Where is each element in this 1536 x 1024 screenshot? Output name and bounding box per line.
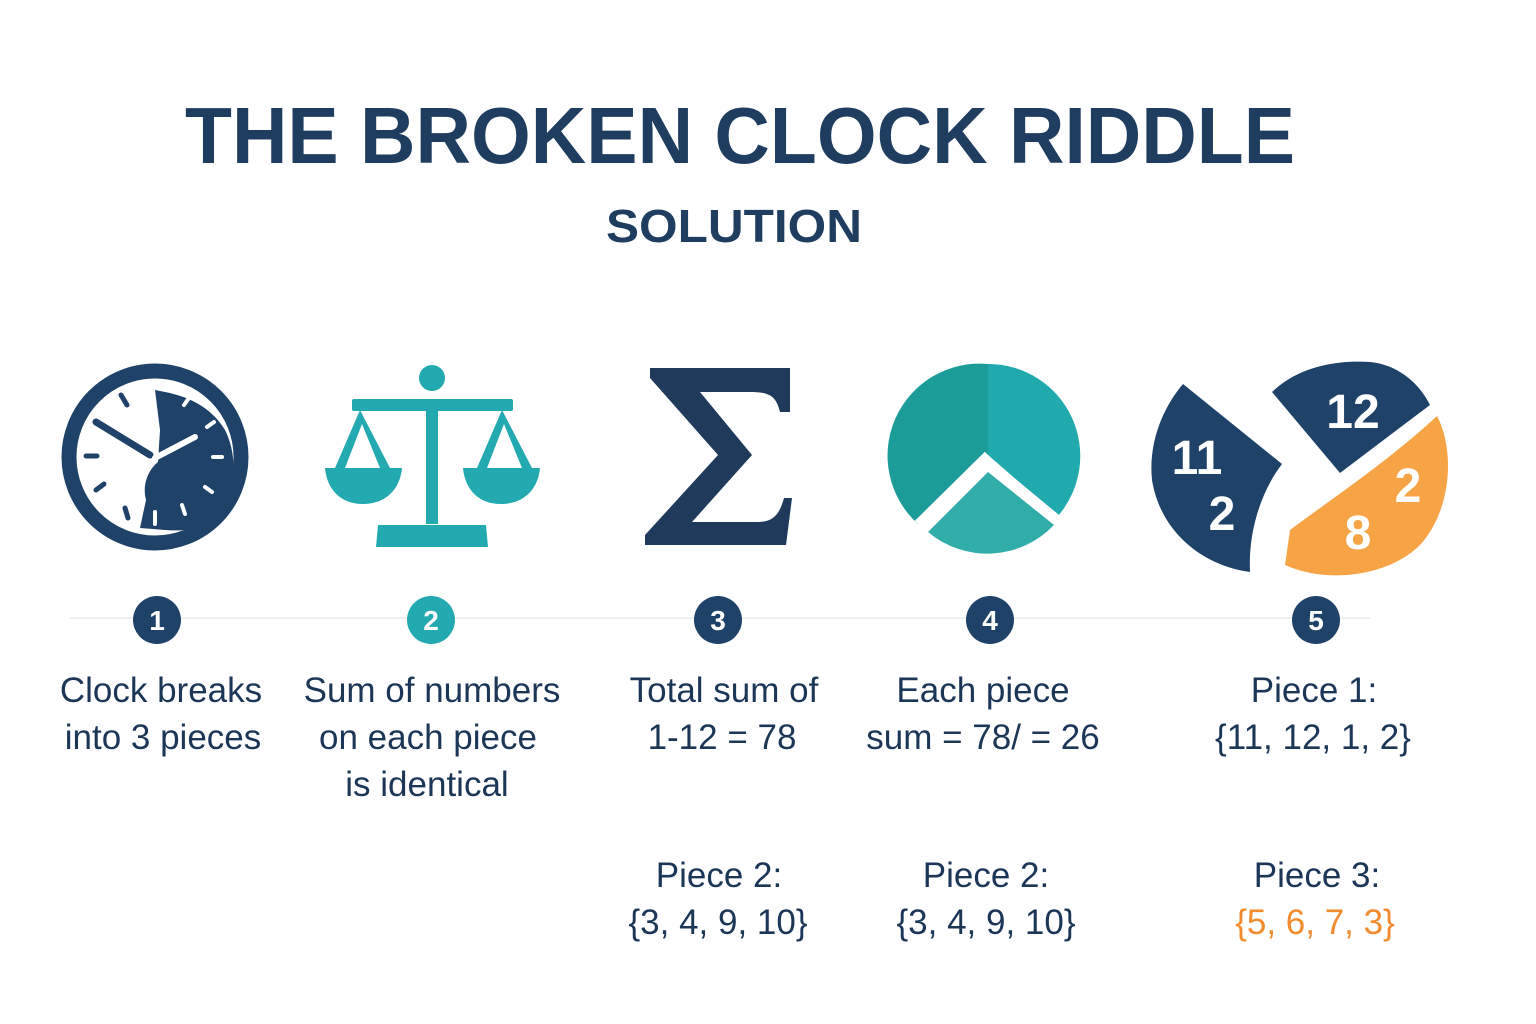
step texts: 1-12 = 78 — [648, 718, 796, 757]
step texts: sum = 78/ = 26 — [866, 718, 1100, 757]
icon: broken pieces — [1151, 362, 1448, 575]
step texts: Sum of numbers — [304, 671, 560, 710]
icon: broken clock — [69, 371, 241, 543]
step badges: 5 — [1308, 605, 1324, 636]
step texts: {5, 6, 7, 3} — [1235, 903, 1395, 942]
step badges — [133, 596, 1340, 644]
icon: broken pieces: 2 — [1395, 460, 1421, 513]
icon: pie chart — [888, 364, 1080, 554]
step texts: {3, 4, 9, 10} — [896, 903, 1076, 942]
step badges: 3 — [710, 605, 726, 636]
step texts: on each piece — [319, 718, 537, 757]
step texts: is identical — [345, 765, 509, 804]
step texts: Total sum of — [630, 671, 819, 710]
step texts: {11, 12, 1, 2} — [1215, 718, 1411, 757]
step badges: 2 — [423, 605, 439, 636]
icon: broken pieces: 2 — [1209, 488, 1235, 541]
subtitle: SOLUTION — [606, 200, 862, 252]
icon: broken pieces: 11 — [1172, 432, 1222, 485]
step texts — [60, 671, 1411, 942]
icon: scale — [325, 365, 540, 547]
step texts: Piece 1: — [1251, 671, 1377, 710]
step badges: 4 — [982, 605, 998, 636]
step texts: Each piece — [896, 671, 1070, 710]
step texts: into 3 pieces — [65, 718, 261, 757]
step texts: Piece 2: — [923, 856, 1049, 895]
icon: sigma — [645, 368, 792, 545]
step texts: Piece 3: — [1254, 856, 1380, 895]
step texts: {3, 4, 9, 10} — [628, 903, 808, 942]
step texts: Piece 2: — [656, 856, 782, 895]
icon: broken pieces: 8 — [1345, 507, 1371, 560]
step texts: Clock breaks — [60, 671, 262, 710]
step badges: 1 — [149, 605, 165, 636]
title: THE BROKEN CLOCK RIDDLE — [185, 91, 1295, 180]
icon: broken pieces: 12 — [1326, 386, 1380, 439]
